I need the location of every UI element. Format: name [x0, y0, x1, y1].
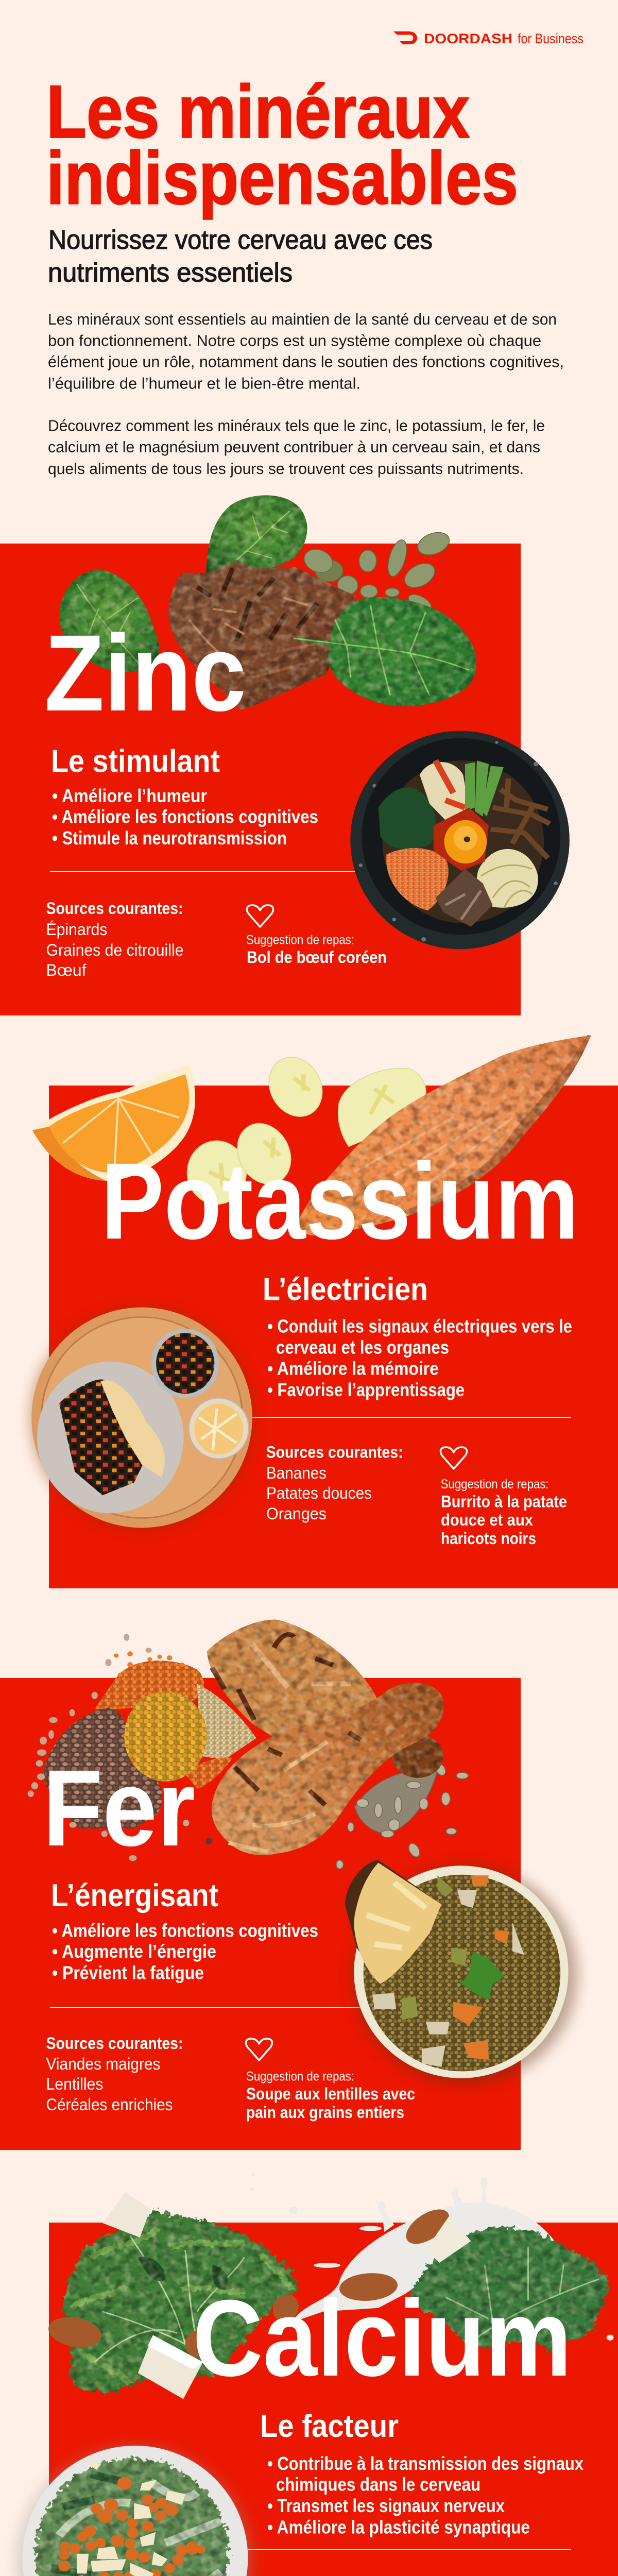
fer common sources: Lentilles [46, 2075, 103, 2093]
potassium benefits list: • Conduit les signaux électriques vers le [267, 1316, 572, 1337]
zinc meal suggestion: Suggestion de repas: [246, 933, 354, 947]
icon: spinach leaf large [294, 597, 476, 706]
fer common sources [46, 2034, 183, 2114]
zinc divider [50, 871, 355, 872]
potassium panel background [49, 1086, 618, 1588]
icon: spinach leaf left [59, 570, 159, 672]
title [46, 70, 518, 219]
calcium divider [248, 2549, 571, 2550]
fer nickname: L’énergisant [51, 1878, 218, 1913]
calcium meal photo: kale caesar salad [16, 2445, 252, 2576]
zinc common sources [46, 899, 183, 979]
icon: pumpkin seeds [300, 528, 453, 613]
calcium title: Calcium [193, 2277, 572, 2399]
potassium meal suggestion: douce et aux [441, 1511, 533, 1529]
panel: zinc [0, 495, 570, 1015]
zinc meal suggestion [246, 933, 387, 967]
title: indispensables [46, 136, 518, 219]
intro paragraph 2: quels aliments de tous les jours se trouvent ces puissants nutriments. [48, 460, 524, 478]
fer common sources: Viandes maigres [46, 2055, 161, 2073]
panel: fer [0, 1619, 577, 2150]
icon: DoorDash dash mark [393, 31, 417, 44]
potassium meal photo: burrito plate [31, 1307, 253, 1530]
logo wordmark: DOORDASH [424, 31, 512, 46]
panel: calcium [16, 2173, 618, 2576]
fer benefits list: • Augmente l’énergie [52, 1941, 216, 1962]
intro paragraph [48, 310, 564, 393]
icon: heart [440, 1447, 467, 1469]
fer benefits list [52, 1920, 318, 1984]
intro paragraph 2: calcium et le magnésium peuvent contribuer à un cerveau sain, et dans [48, 438, 540, 456]
icon: milk splash [250, 2173, 614, 2341]
calcium ingredients [45, 2173, 614, 2399]
fer meal suggestion: Suggestion de repas: [246, 2070, 354, 2084]
intro paragraph 2: Découvrez comment les minéraux tels que le zinc, le potassium, le fer, le [48, 417, 545, 435]
icon: heart [247, 905, 273, 927]
icon: tofu cubes [102, 2192, 471, 2399]
potassium ingredients [32, 1035, 591, 1236]
fer meal suggestion: Soupe aux lentilles avec [246, 2084, 415, 2103]
potassium common sources: Oranges [266, 1504, 327, 1523]
fer meal suggestion: pain aux grains entiers [246, 2103, 404, 2122]
potassium benefits list: • Favorise l’apprentissage [267, 1379, 465, 1400]
intro paragraph: l’équilibre de l’humeur et le bien-être mental. [48, 374, 360, 393]
zinc common sources: Bœuf [46, 961, 87, 979]
zinc common sources: Graines de citrouille [46, 941, 183, 959]
icon: grilled steak [168, 561, 357, 710]
subtitle: Nourrissez votre cerveau avec ces [48, 225, 433, 255]
icon: chicken drumstick [212, 1683, 444, 1855]
intro paragraph 2 [48, 417, 545, 478]
potassium nickname: L’électricien [263, 1272, 428, 1308]
fer divider [50, 2007, 359, 2008]
fer meal photo: lentil soup with bread [345, 1860, 577, 2085]
potassium benefits list: • Améliore la mémoire [267, 1358, 439, 1379]
panel: potassium [31, 1035, 618, 1588]
potassium common sources: Sources courantes: [266, 1443, 403, 1461]
potassium meal suggestion: Suggestion de repas: [441, 1477, 549, 1492]
zinc benefits list: • Améliore les fonctions cognitives [52, 806, 318, 827]
subtitle [48, 225, 433, 288]
calcium benefits list: • Améliore la plasticité synaptique [267, 2516, 530, 2537]
fer common sources: Céréales enrichies [46, 2095, 173, 2114]
icon: almonds [45, 2202, 456, 2357]
icon: orange wedge [32, 1064, 195, 1181]
potassium common sources [266, 1443, 403, 1523]
fer benefits list: • Améliore les fonctions cognitives [52, 1920, 318, 1941]
potassium common sources: Bananes [266, 1464, 327, 1482]
zinc benefits list: • Stimule la neurotransmission [52, 827, 287, 849]
subtitle: nutriments essentiels [48, 258, 293, 288]
calcium benefits list: chimiques dans le cerveau [276, 2474, 480, 2495]
icon: kale right [406, 2227, 609, 2351]
zinc ingredients [59, 495, 476, 710]
logo: DoorDash for Business [393, 31, 583, 46]
zinc nickname: Le stimulant [51, 744, 220, 779]
fer benefits list: • Prévient la fatigue [52, 1962, 204, 1984]
intro paragraph: Les minéraux sont essentiels au maintien de la santé du cerveau et de son [48, 310, 557, 328]
intro paragraph: bon fonctionnement. Notre corps est un système complexe où chaque [48, 332, 541, 350]
logo suffix: for Business [518, 31, 583, 46]
icon: kale left [63, 2210, 298, 2395]
potassium benefits list: cerveau et les organes [276, 1336, 449, 1358]
potassium benefits list [267, 1316, 572, 1400]
potassium meal suggestion: Burrito à la patate [441, 1492, 567, 1511]
zinc meal suggestion: Bol de bœuf coréen [247, 948, 387, 967]
icon: sunflower seeds [336, 1762, 468, 1869]
zinc benefits list [52, 785, 318, 849]
fer common sources: Sources courantes: [46, 2034, 183, 2053]
icon: roast chicken thigh [207, 1619, 377, 1739]
fer ingredients [28, 1619, 468, 1869]
fer title: Fer [43, 1747, 195, 1869]
zinc panel background [0, 544, 521, 1015]
fer meal suggestion [246, 2070, 415, 2122]
icon: spinach leaf top [206, 495, 307, 574]
potassium meal suggestion: haricots noirs [441, 1529, 536, 1548]
icon: banana slices [187, 1050, 426, 1205]
zinc common sources: Épinards [46, 920, 107, 939]
zinc benefits list: • Améliore l’humeur [52, 785, 207, 806]
zinc meal photo: bibimbap bowl [350, 731, 570, 949]
potassium common sources: Patates douces [266, 1484, 372, 1502]
potassium meal suggestion [441, 1477, 567, 1548]
icon: lentils and beans [28, 1634, 256, 1861]
icon: sweet potato [295, 1035, 591, 1236]
calcium benefits list: • Transmet les signaux nerveux [267, 2495, 505, 2516]
icon: heart [246, 2039, 272, 2060]
calcium panel background [49, 2223, 618, 2576]
title: Les minéraux [46, 70, 470, 154]
fer panel background [0, 1678, 521, 2150]
calcium benefits list [267, 2453, 583, 2537]
zinc title: Zinc [44, 612, 246, 734]
zinc common sources: Sources courantes: [46, 899, 183, 918]
intro paragraph: élément joue un rôle, notamment dans le soutien des fonctions cognitives, [48, 352, 564, 370]
potassium divider [252, 1417, 571, 1418]
calcium nickname: Le facteur [260, 2409, 399, 2444]
